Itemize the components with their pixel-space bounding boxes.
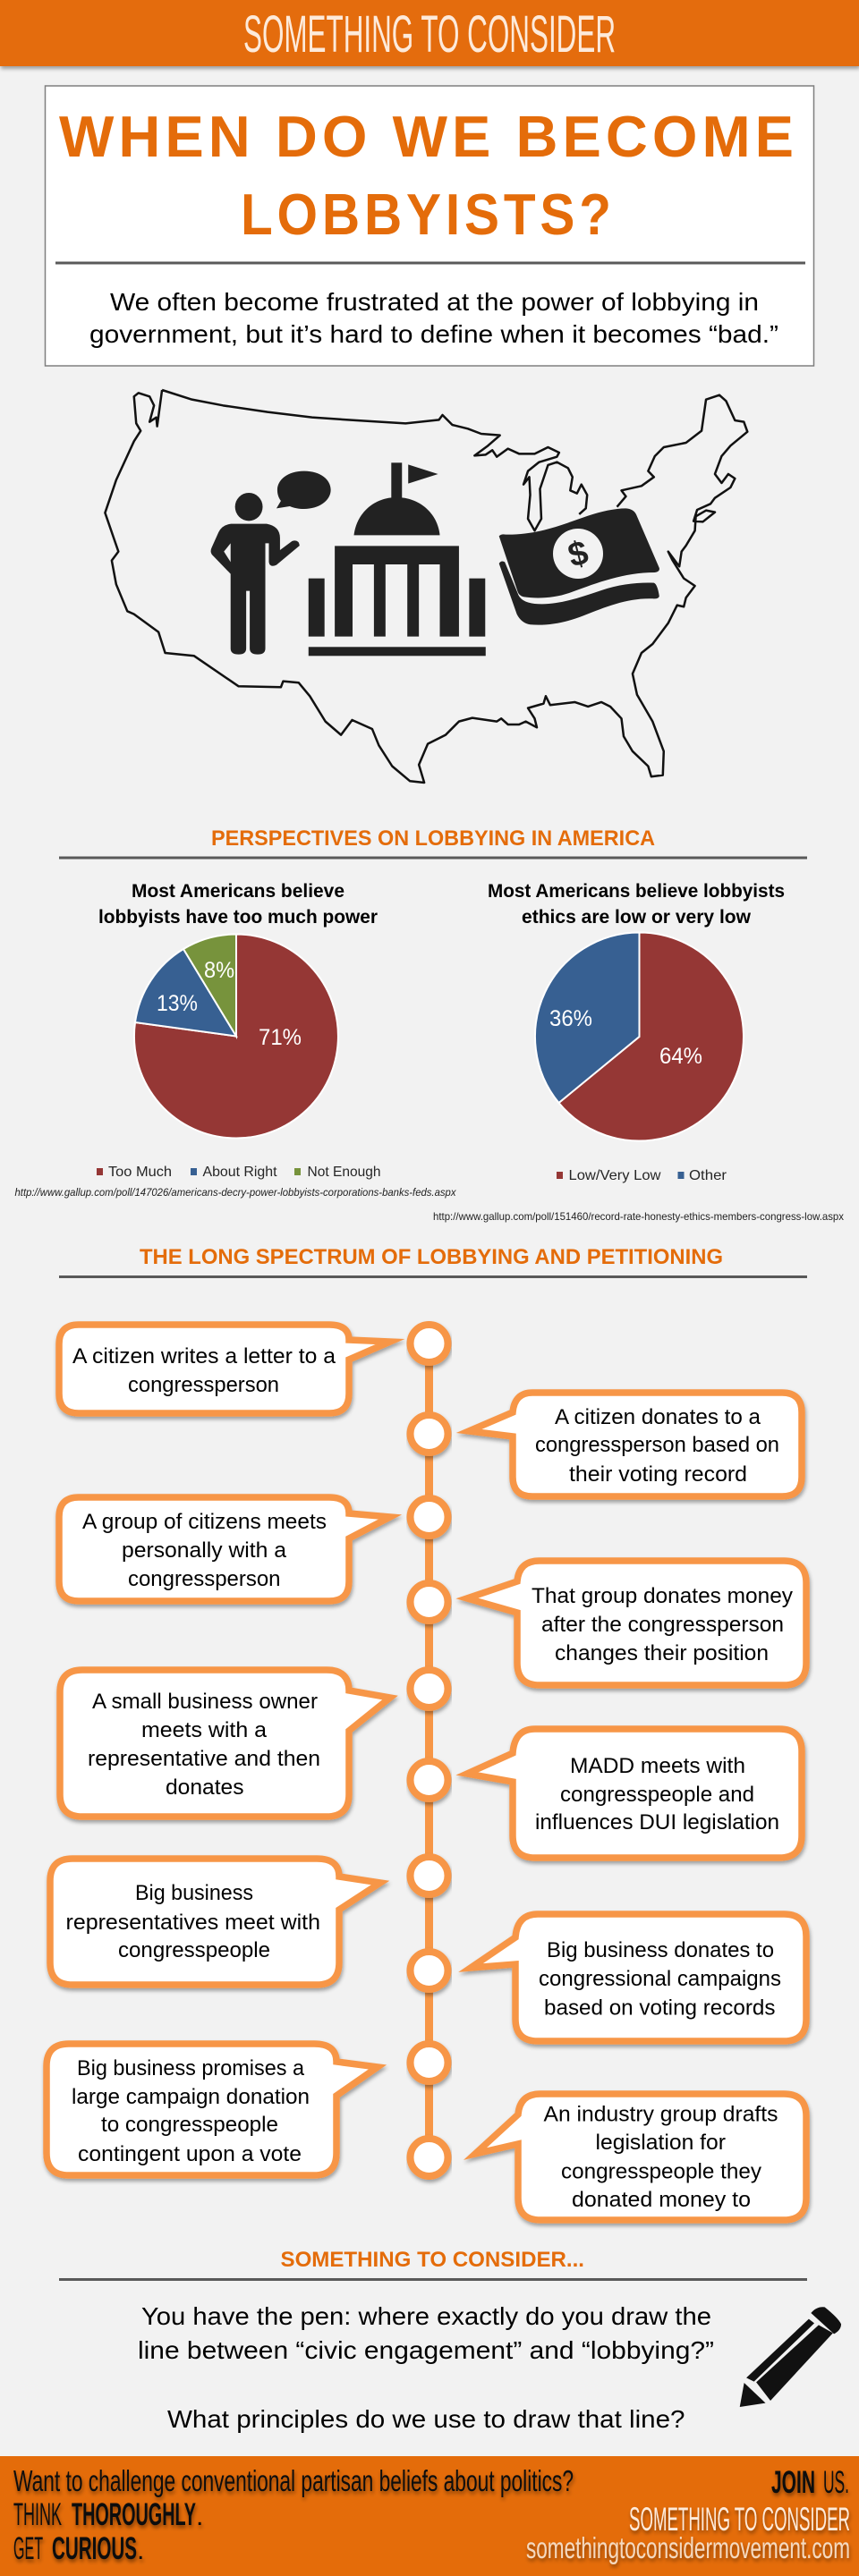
callout 10: congresspeople they [561,2159,761,2184]
callout 2 [469,1393,802,1496]
callout 7: Big business [135,1881,253,1905]
legend: Low/Very Low [569,1168,661,1183]
callout 1: congressperson [128,1373,279,1397]
pie chart [535,932,744,1141]
callout 4: That group donates money [532,1584,793,1608]
closing questions [138,2302,714,2433]
pie chart: 64% [659,1044,702,1069]
header banner [0,0,859,66]
callout 2: A citizen donates to a [555,1405,761,1429]
callout 10 [475,2094,806,2220]
callout 5: donates [166,1775,243,1800]
pie chart: 8% [204,958,234,983]
callout 8: Big business donates to [547,1938,774,1962]
callout 9: to congresspeople [101,2113,278,2137]
footer call to action [13,2464,574,2566]
source link: http://www.gallup.com/poll/147026/americans-decry-power-lobbyists-corporations-banks-feds.aspx [14,1186,456,1199]
intro text: We often become frustrated at the power of lobbying in [110,288,759,316]
footer call to action: THOROUGHLY [72,2497,196,2532]
callout 2: congressperson based on [535,1433,779,1457]
callout 6: influences DUI legislation [535,1810,779,1835]
title [59,104,794,248]
map illustration [105,390,747,783]
callout 8: congressional campaigns [539,1967,781,1991]
callout 4 [467,1561,806,1685]
icon: person speaking [211,471,331,655]
heading: perspectives: PERSPECTIVES ON LOBBYING IN AMERICA [211,826,655,851]
chart panel: too much power [14,881,456,1199]
heading: something to consider: SOMETHING TO CONSIDER... [281,2248,584,2272]
callout 1: A citizen writes a letter to a [72,1344,336,1368]
heading: perspectives [59,826,807,859]
legend [557,1168,727,1183]
callout 5: A small business owner [92,1690,318,1714]
callout 3: A group of citizens meets [82,1510,327,1534]
callout 4: after the congressperson [541,1613,784,1637]
chart title: Most Americans believe lobbyists [488,881,785,902]
footer call to action: Want to challenge conventional partisan beliefs about politics? [13,2464,574,2497]
callout 5: representative and then [88,1747,320,1771]
intro text: government, but it’s hard to define when it becomes “bad.” [89,320,778,348]
footer join us and website [526,2465,850,2564]
footer call to action: CURIOUS [52,2531,137,2566]
footer call to action: . [196,2502,203,2531]
callout 8 [471,1914,806,2041]
callout 9: Big business promises a [77,2056,305,2080]
title: LOBBYISTS? [241,182,611,248]
callout 5: meets with a [141,1718,268,1742]
icon: capitol building [309,462,486,656]
footer call to action: . [137,2536,144,2565]
icon: money: $ [565,534,592,575]
legend: Too Much [108,1165,172,1180]
callout 6: MADD meets with [570,1754,745,1778]
heading: spectrum: THE LONG SPECTRUM OF LOBBYING AND PETITIONING [140,1245,723,1269]
callout 9: contingent upon a vote [78,2142,302,2166]
timeline spine and nodes [410,1325,447,2176]
callout 8: based on voting records [544,1996,775,2020]
icon: money [499,508,659,625]
chart title: ethics are low or very low [522,907,752,928]
callout 9 [47,2044,378,2175]
callout 3 [59,1497,390,1601]
callout 2: their voting record [569,1462,747,1487]
chart title: Most Americans believe [132,881,344,902]
pie chart: 71% [259,1025,302,1050]
callout 10: legislation for [596,2131,726,2155]
callout 5 [60,1670,390,1817]
callout 3: congressperson [128,1567,281,1591]
callout 10: donated money to [572,2188,751,2212]
legend: About Right [202,1165,277,1180]
closing questions: You have the pen: where exactly do you draw the [141,2302,711,2330]
title panel [45,86,814,366]
callout 3: personally with a [122,1538,287,1563]
callout 6 [467,1729,802,1858]
footer join us and website: JOIN [771,2465,815,2500]
chart title [488,881,785,928]
footer call to action: THINK [13,2497,62,2532]
intro text [89,288,778,348]
callout 10: An industry group drafts [544,2102,778,2127]
callout 7 [50,1859,380,1985]
callout 9: large campaign donation [72,2085,310,2109]
title: WHEN DO WE BECOME [59,104,794,169]
chart panel: ethics [433,881,844,1223]
pie chart: 36% [549,1006,592,1031]
legend [97,1165,381,1180]
closing questions: What principles do we use to draw that line? [167,2405,685,2433]
legend: Other [689,1168,727,1183]
footer banner [0,2456,859,2576]
heading: spectrum [59,1245,807,1278]
callout 6: congresspeople and [560,1783,754,1807]
callout 7: congresspeople [118,1938,270,1962]
source link: http://www.gallup.com/poll/151460/record-rate-honesty-ethics-members-congress-low.aspx [433,1210,844,1223]
callout 1 [59,1325,390,1413]
heading: something to consider [59,2248,807,2281]
pie chart: 13% [157,991,198,1016]
icon: pencil [740,2307,841,2407]
footer call to action: GET [13,2531,43,2566]
chart title [98,881,378,928]
closing questions: line between “civic engagement” and “lobbying?” [138,2336,714,2364]
callout 7: representatives meet with [66,1911,320,1935]
chart title: lobbyists have too much power [98,907,378,928]
legend: Not Enough [308,1165,381,1180]
pie chart [134,934,338,1138]
callout 4: changes their position [555,1641,769,1665]
US map outline [105,390,747,783]
